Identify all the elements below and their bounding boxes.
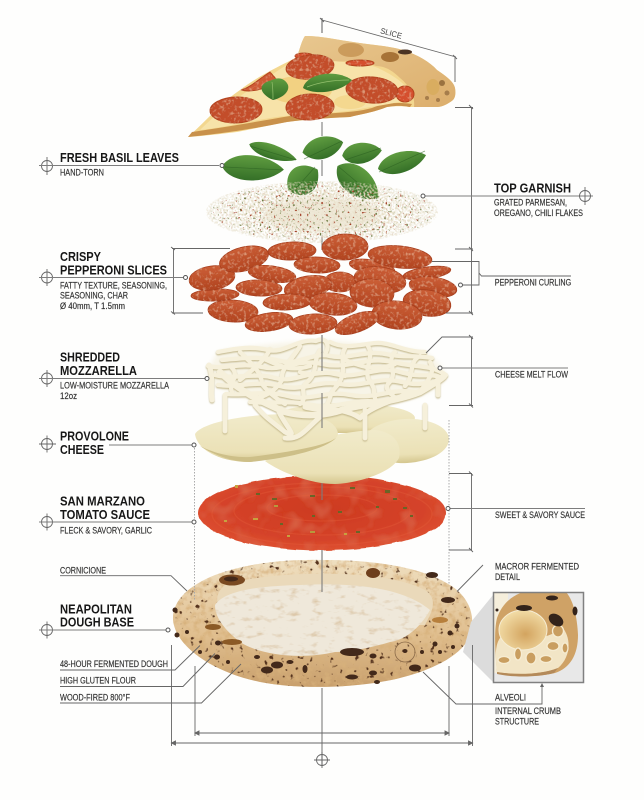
mozzarella backing <box>207 340 446 416</box>
callout: provolone cheese: CHEESE <box>60 442 104 457</box>
callout: macro fermented detail: MACROR FERMENTED <box>495 561 579 571</box>
callout: fresh basil leaves: FRESH BASIL LEAVES <box>60 150 179 165</box>
callout: crispy pepperoni slices <box>39 247 230 314</box>
callout: provolone cheese: PROVOLONE <box>60 429 129 444</box>
callout: top garnish: GRATED PARMESAN, <box>494 198 567 208</box>
callout: dough specs <box>60 646 241 703</box>
callout: shredded mozzarella: LOW-MOISTURE MOZZARELLA <box>60 381 169 391</box>
callout: shredded mozzarella: 12oz <box>60 391 77 401</box>
slice label: SLICE <box>379 26 403 41</box>
callout: cheese melt flow: CHEESE MELT FLOW <box>495 369 568 379</box>
slice dimension <box>320 18 457 82</box>
callout: san marzano tomato sauce: TOMATO SAUCE <box>60 507 150 522</box>
basil on slice <box>262 74 352 100</box>
callout: top garnish: TOP GARNISH <box>494 180 571 195</box>
char spots <box>172 568 460 684</box>
center axis over cheese <box>321 335 323 428</box>
callout: alveoli: STRUCTURE <box>495 717 539 727</box>
oregano flecks <box>224 485 413 537</box>
tomato sauce <box>198 476 446 550</box>
callout: crispy pepperoni slices: SEASONING, CHAR <box>60 290 128 300</box>
provolone front slices <box>195 414 400 484</box>
center axis over dough <box>321 550 323 592</box>
dimension lines bottom <box>172 645 472 746</box>
center axis over sauce <box>321 483 323 500</box>
callout: fresh basil leaves: HAND-TORN <box>60 168 104 178</box>
callout: shredded mozzarella <box>39 350 209 401</box>
callout: sweet and savory sauce: SWEET & SAVORY SAUCE <box>495 510 585 520</box>
callout: macro fermented detail <box>457 561 579 592</box>
callout: neapolitan dough base: NEAPOLITAN <box>60 601 132 616</box>
pizza slice <box>188 36 455 137</box>
inset wedge <box>463 595 493 682</box>
callout: shredded mozzarella: SHREDDED <box>60 350 120 365</box>
shredded mozzarella <box>208 340 446 438</box>
bottom crosshair <box>314 752 330 768</box>
callout: neapolitan dough base: DOUGH BASE <box>60 615 134 630</box>
callout: provolone cheese <box>39 429 196 457</box>
callout: cheese melt flow <box>426 335 568 408</box>
detail inset <box>494 590 584 682</box>
provolone slices <box>275 403 450 465</box>
callout: alveoli <box>423 672 561 727</box>
callout: crispy pepperoni slices: Ø 40mm, T 1.5mm <box>60 301 125 311</box>
callout: san marzano tomato sauce: SAN MARZANO <box>60 494 145 509</box>
callout: pepperoni curling <box>432 250 571 315</box>
magnifier circle <box>395 642 415 662</box>
callout: dough specs: WOOD-FIRED 800°F <box>60 693 130 703</box>
basil leaves <box>221 131 429 209</box>
callout: macro fermented detail: DETAIL <box>495 572 520 582</box>
callout: pepperoni curling: PEPPERONI CURLING <box>495 278 571 288</box>
dough base <box>172 560 472 687</box>
pepperoni layer <box>188 233 458 339</box>
callout: san marzano tomato sauce <box>39 494 196 535</box>
callout: shredded mozzarella: MOZZARELLA <box>60 363 138 378</box>
callout: fresh basil leaves <box>39 150 224 178</box>
callout: top garnish: OREGANO, CHILI FLAKES <box>494 208 583 218</box>
callout: cornicione <box>60 565 187 591</box>
callout: crispy pepperoni slices: CRISPY <box>60 249 101 264</box>
callout: san marzano tomato sauce: FLECK & SAVORY, GARLIC <box>60 525 152 535</box>
callout: crispy pepperoni slices: FATTY TEXTURE, SEASONING, <box>60 280 167 290</box>
callout: neapolitan dough base <box>39 601 170 638</box>
callout: alveoli: ALVEOLI <box>495 693 526 703</box>
callout: cornicione: CORNICIONE <box>60 565 106 575</box>
center axis line <box>321 18 323 765</box>
callout: dough specs: HIGH GLUTEN FLOUR <box>60 676 136 686</box>
callout: crispy pepperoni slices: PEPPERONI SLICES <box>60 262 167 277</box>
dotted guides <box>194 420 449 600</box>
garnish pile <box>206 181 438 243</box>
callout: alveoli: INTERNAL CRUMB <box>495 706 561 716</box>
callout: dough specs: 48-HOUR FERMENTED DOUGH <box>60 659 168 669</box>
callout: top garnish <box>421 105 593 251</box>
callout: sweet and savory sauce <box>446 472 585 552</box>
